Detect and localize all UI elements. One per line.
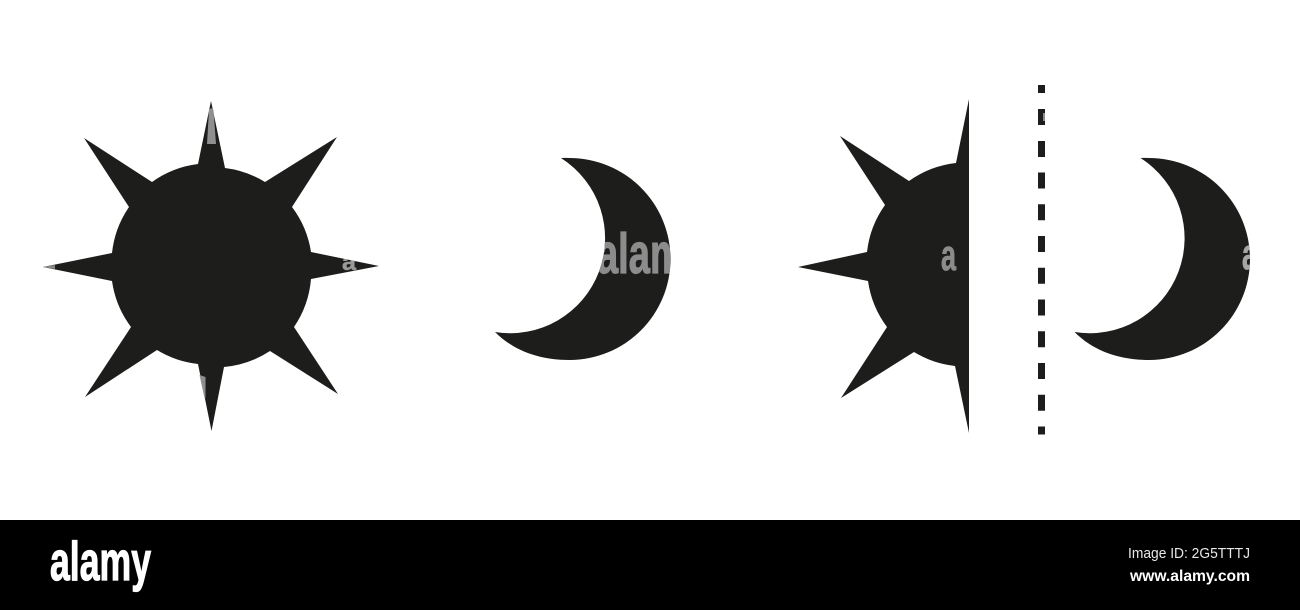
icon: crescent moon right (1074, 158, 1257, 360)
icon: crescent moon (495, 158, 670, 360)
icon: crescent moon right: a (1242, 230, 1257, 279)
footer bar (0, 520, 1300, 610)
dashed divider (1038, 85, 1045, 434)
website: www.alamy.com (1129, 568, 1250, 585)
icon: half sun (798, 99, 969, 433)
logo: alamy: alamy (50, 530, 151, 592)
icon: crescent moon: alamy (597, 222, 705, 286)
icon: half sun: a (941, 231, 956, 280)
icon: sun: a (342, 249, 357, 276)
icon: sun (43, 101, 379, 431)
image id: Image ID: 2G5TTTJ (1128, 545, 1250, 562)
